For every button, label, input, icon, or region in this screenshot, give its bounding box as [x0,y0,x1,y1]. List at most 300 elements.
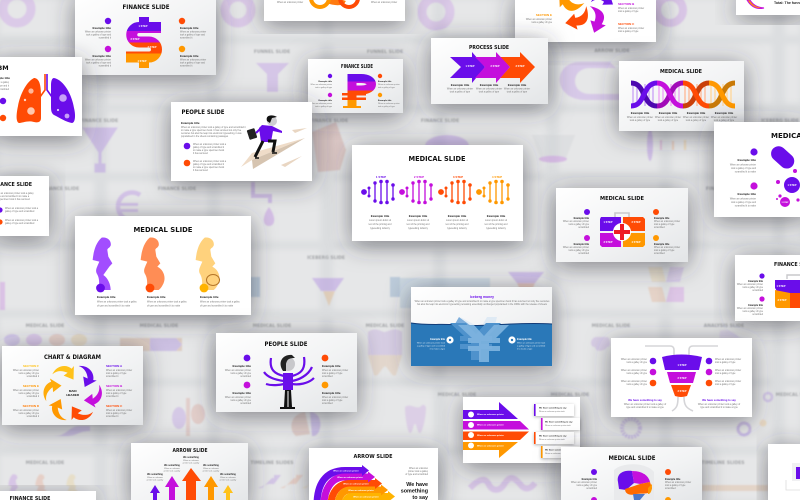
steps: When an unknown printer took a [193,143,227,146]
chart: big arrow: When an unknown printer [477,413,504,416]
steps: took a galley of type [378,105,395,108]
chart: funnel [662,354,702,397]
sections right: scrambled it [106,395,119,398]
section labels: SECTION B [618,2,635,6]
sections left: SECTION F [23,364,39,368]
chart: cycle arrows: HEADER [66,393,80,397]
steps: scrambled [240,375,252,378]
steps: scrambled [752,313,764,316]
faded background slides: FINANCE SLIDE [80,118,118,124]
callout: of type and scrambled [405,473,429,476]
arrow labels: When an unknown printer [343,482,369,486]
sections right: took a galley of type [106,412,127,415]
steps: Example title [737,158,756,162]
sections right: SECTION A [106,364,123,368]
steps right: scrambled it [180,64,193,68]
icon: briefcase: 3 STEP [778,298,787,302]
icon: man on paper plane [241,115,307,169]
example text: took a galley of type [630,119,651,122]
markers right: took a galley of type [715,372,736,375]
steps: Example title [574,243,590,246]
steps: took a galley of type [569,249,590,252]
title: PEOPLE SLIDE [182,108,224,116]
example text [97,295,241,308]
callout: We have [406,482,428,488]
slide: lungs [0,57,82,136]
icon: first aid kit: 1 STEP [604,220,613,224]
title: PEOPLE SLIDE [264,341,308,348]
steps: took a galley of type [231,372,252,375]
callout: When an unknown [409,468,429,470]
chart: double helix [631,83,735,106]
faded background slides: TIMELINE SLIDES [701,460,745,466]
example text: Lorem ipsum dolor sit [369,219,391,222]
icon: lungs [17,74,75,123]
sections left: took a galley of type [19,372,40,375]
icon: many-armed figure [264,355,314,409]
steps: When an unknown printer took a [193,160,227,163]
example text: typesetting industry [447,227,468,230]
left callout: When an unknown printer took [417,342,446,344]
steps: Example title [322,391,341,395]
slide: arrow curved [309,448,438,500]
faded background slides: FINANCE SLIDE [41,186,79,192]
steps right: took a galley of type and [180,34,206,36]
steps [563,209,680,255]
slide: medical helix [619,61,744,131]
slide: finance left [0,176,49,236]
faded background slides: ICEBERG SLIDE [307,255,345,261]
chart: DNA steps: 1 STEP [376,175,386,179]
icon: briefcase [775,275,800,308]
steps: scrambled [654,226,665,229]
example text: took a galley of type [714,119,735,122]
intro text: When an unknown printer took a galley of type and scrambled it to make a type specimen book It has survived not only five centuries [415,300,550,303]
faded background slides: TIMELINE SLIDES [250,460,294,466]
example text: took a galley of type [658,119,679,122]
sections left: scrambled it [27,395,39,398]
steps: took a galley of type [569,223,590,226]
steps: took a galley of type [577,484,598,487]
icon: first aid kit: 3 STEP [604,240,613,244]
chart: curved arrows [317,465,395,500]
section labels: took a galley of type [618,30,639,33]
icon: orange silhouette [141,238,165,290]
example text: When an unknown printer [447,88,473,90]
example text [627,111,737,122]
labels: We something [147,473,163,476]
steps: When an unknown printer [737,283,763,286]
example text: When an unknown printer [655,116,681,119]
chart: funnel: 1 STEP [678,363,687,367]
callouts: We have something to say [628,398,662,402]
title: PROCESS SLIDE [469,45,509,51]
section labels: When an unknown printer [618,7,644,10]
steps: took a galley of type [654,249,675,252]
markers left [621,358,656,386]
sections left: When an unknown printer [13,389,39,392]
title: MEDICAL SLIDE [660,69,702,75]
sections left: scrambled it [27,415,39,418]
steps: scrambled [578,252,590,255]
labels: We something [164,464,180,467]
text block: When an unknown printer took a galley of type and scrambled it [181,126,246,129]
markers left: When an unknown printer [621,369,647,372]
text block: to make a type specimen book. It has survived not only five [181,129,242,132]
slide: arrow vertical [131,443,248,500]
arrow chevrons: 3 STEP [516,64,525,68]
callouts [624,398,740,409]
steps left: scrambled it [99,64,111,68]
faded background slides: MEDICAL SLIDE [366,323,404,329]
cards: When an unknown printer took [545,424,571,427]
example text: typesetting industry [486,227,507,230]
section labels: took a galley of type [532,21,553,24]
section labels: When an unknown printer [526,18,552,21]
callout [401,468,429,500]
faded background slides: FINANCE SLIDE [158,186,196,192]
title: FINANCE SLIDE [341,64,373,70]
example text: When an unknown printer [683,116,709,119]
sections left: When an unknown printer [13,409,39,412]
arrow chevrons: 2 STEP [491,64,500,68]
faded background slides: ANALYSIS SLIDE [704,323,744,329]
right callout: a galley of type and scrambled [517,344,546,348]
text block: When an unknown printer took a [5,207,39,210]
markers left: took a galley of type [627,383,648,386]
example text: Example title [451,83,470,87]
intro text: but also the leap into electronic typesetting remaining essentially unchanged popularised in the 1960s with the release of sheets [417,303,548,306]
slide: medical brain [561,447,702,500]
title: CHART & DIAGRAM [44,354,101,361]
steps: scrambled [322,375,333,378]
icon: first aid kit: 4 STEP [632,240,641,244]
markers left: When an unknown printer [621,380,647,383]
icon: iceberg yen [450,323,509,362]
slide: top glasses: When an unknown printer [277,1,303,4]
steps: scrambled [240,402,252,405]
example text: Example title [487,214,506,218]
faded background slides: FINANCE SLIDE [421,118,459,124]
example text: Example title [687,111,706,115]
steps: took a galley of type and [731,167,757,170]
slide: process [431,38,548,104]
slide: bottom right [768,444,800,500]
faded background slides: MEDICAL SLIDE [26,460,64,466]
example text: Example title [200,295,219,299]
slide: chart and diagram [2,346,143,427]
sections right: When an unknown printer [106,409,132,412]
arrow chevrons [450,52,535,83]
icon: dollar chart: 4 STEP [138,59,147,63]
markers right: When an unknown printer [715,358,741,361]
labels: printer took a galley [183,462,199,464]
text block: centuries but also the leap into electronic typesetting, it was [181,132,242,135]
steps: galley of type and scrambled it [193,146,224,149]
steps: Example title [665,478,681,481]
cards [534,404,580,458]
example text: Example title [97,295,116,299]
example text: When an unknown printer [504,88,530,90]
steps: scrambled [578,226,590,229]
steps right: Example title [180,54,199,58]
steps: When an unknown printer [378,83,400,86]
labels: printer took a galley [203,470,219,472]
steps: took a galley of type [322,399,343,402]
section labels: When an unknown printer [618,27,644,30]
steps [730,148,758,208]
example text: Example title [409,214,428,218]
steps: Example title [748,304,764,307]
slide: finance ruble [308,59,403,113]
sections right: SECTION C [106,404,123,408]
faded background slides: ARROW SLIDE [594,48,630,54]
example text [447,83,530,94]
example text: text of the printing and [369,223,392,226]
markers right: When an unknown printer [715,369,741,372]
steps: When an unknown printer [654,220,680,223]
markers left: took a galley of type [627,372,648,375]
steps: When an unknown printer [571,481,597,484]
faded background slides: ICEBERG SLIDE [761,118,799,124]
pipes [645,346,718,411]
example text: When an unknown printer [711,116,737,119]
steps: galley of type and scrambled it [193,163,224,166]
faded background slides: MEDICAL SLIDE [592,323,630,329]
steps: Example title [748,280,764,283]
right callout: When an unknown printer took [517,342,546,344]
title: MEDICAL SLIDE [600,196,644,202]
steps: When an unknown printer [225,396,251,399]
steps right: When an unknown printer [180,58,206,62]
icon: dollar chart: 1 STEP [139,24,148,28]
steps: When an unknown printer [737,307,763,310]
callouts: type and scrambled it to make a type [626,406,664,409]
section labels: took a galley of type [618,10,639,13]
steps [310,74,400,108]
steps: scrambled [586,487,598,490]
labels: When an unknown [164,468,180,470]
icon: dollar chart [126,17,161,68]
steps: When an unknown printer [310,102,332,105]
icon: pill and dots [768,143,800,207]
faded background slides: MEDICAL SLIDE [551,392,589,398]
example text: Example title [371,214,390,218]
labels: printer took a galley [220,478,236,482]
steps right: took a galley of type and [180,62,206,64]
sections right: took a galley of type [106,372,127,375]
steps: scrambled it to make [735,204,757,208]
labels: We something [203,464,219,467]
cards: We have something to say [539,406,567,410]
steps: took a galley of type [743,286,764,289]
callouts: type and scrambled it to make a type [700,406,738,409]
icon: ruble [342,78,372,108]
callout: something [401,488,428,494]
steps: took a galley of type [315,86,332,89]
text block: galley of type and scrambled [5,222,35,225]
steps: took a galley of type [378,86,395,89]
labels: When an unknown [147,477,163,479]
title: MEDICAL SLIDE [134,226,193,234]
markers right: When an unknown printer [715,380,741,383]
section labels: SECTION E [536,13,552,17]
steps [571,469,691,500]
callouts: When an unknown printer took a galley of [624,403,666,406]
slide: finance dollar [75,0,216,75]
steps: When an unknown printer [322,396,348,399]
steps left: When an unknown printer [85,58,111,62]
steps: Example title [318,80,333,83]
right callout: it to make a type [517,348,533,350]
icon: dollar chart: 2 STEP [131,37,140,41]
icon: pill and dots: 1 STEP [788,183,797,187]
slide: medical pill [714,122,800,217]
steps: When an unknown printer [322,369,348,372]
sections right [106,364,132,418]
title: ARROW SLIDE [354,454,393,460]
icon: yellow silhouette [196,238,220,290]
text block: galley of type and scrambled [5,210,35,213]
steps left: took a galley of type and [86,62,112,64]
steps: scrambled [665,487,676,490]
slide: funnel [611,338,752,417]
example text [369,214,508,230]
steps: took a galley of type and [731,201,757,204]
slide: finance briefcase [735,255,800,321]
steps: When an unknown printer [225,369,251,372]
icon: purple silhouette [93,238,112,290]
title: MEDICAL SLIDE [408,155,466,163]
arrow labels: When an unknown printer [353,496,379,498]
steps left: Example title [92,54,111,58]
chart: cycle arrows [37,359,108,427]
sections right: scrambled it [106,415,119,418]
example text: When an unknown printer took a galley [147,300,188,304]
example text: took a galley of type [686,119,707,122]
cards: When an unknown printer took [539,438,565,441]
steps left: took a galley of type and [86,34,112,36]
slide: section swirl [515,0,656,42]
sections left [13,364,40,418]
steps: Example title [654,217,670,220]
steps: When an unknown printer [563,246,589,249]
steps right: When an unknown printer [180,30,206,34]
sections right: took a galley of type [106,392,127,395]
example text: Example title [715,111,734,115]
title: MEDICAL SLIDE [608,455,656,462]
example text: When an unknown printer [627,116,653,119]
example text: When an unknown printer took a galley [200,300,241,304]
faded background slides: FINANCE SLIDE [706,186,744,192]
icon: berg top [455,317,497,325]
example text: of type and scrambled it to make [200,304,234,308]
example text: Example title [631,111,650,115]
example text: took a galley of type [479,90,500,94]
arrow labels: When an unknown printer [333,470,359,472]
sections left: took a galley of type [19,412,40,415]
steps: When an unknown printer [665,481,691,484]
arrow chevrons: 1 STEP [466,64,475,68]
section labels [526,2,644,33]
example text: When an unknown printer took a galley [97,300,138,304]
slide: top right [736,0,800,15]
markers left: When an unknown printer [621,358,647,361]
steps: took a galley of type [322,372,343,375]
steps right: Example title [180,26,199,30]
example text: Lorem ipsum dolor sit [485,219,507,222]
cards: When an unknown printer took [539,410,565,413]
sections left: scrambled it [27,375,39,378]
faded background slides: MEDICAL SLIDE [140,323,178,329]
icon: first aid kit: 2 STEP [632,220,641,224]
markers right: took a galley of type [715,361,736,364]
slide: top glasses [264,0,405,21]
labels: We something [220,473,236,476]
sections left: SECTION E [23,384,39,388]
steps: took a galley of type [315,105,332,108]
left callout: Example title [430,338,446,341]
markers right: took a galley of type [715,383,736,386]
labels: printer took a galley [147,478,163,482]
steps: to make a type specimen book [193,166,225,169]
steps: scrambled [654,252,665,255]
sections left: When an unknown printer [13,369,39,372]
chart: big arrow: When an unknown printer [477,444,504,448]
chart: DNA steps: 4 STEP [492,175,502,179]
chart: funnel: 3 STEP [678,389,687,393]
steps: It has survived [193,169,209,172]
faded background slides: FINANCE SLIDE [310,118,348,124]
markers left: took a galley of type [627,361,648,364]
slide: medical women [75,216,251,315]
steps: It has survived [193,152,209,155]
steps [737,273,765,316]
example text: Example title [659,111,678,115]
text block [0,192,39,225]
icon: swirl arrows [553,0,617,35]
steps: scrambled [322,402,333,405]
left callout [417,336,454,350]
faded background slides: FUNNEL SLIDE [254,49,290,55]
text block: popularised in the sheets containing passages [181,135,229,138]
chart: big arrow [463,402,529,458]
left callout: a galley of type and scrambled [417,344,446,348]
steps: took a galley of type [231,399,252,402]
steps: Example title [582,478,598,481]
steps: When an unknown printer [310,83,332,86]
steps: Example title [737,192,756,196]
steps [225,355,348,405]
icon: chart fragment [786,463,800,490]
icon: pill and dots: 3 STEP [782,202,789,204]
right callout [508,336,546,350]
faded background slides: MEDICAL SLIDE [438,392,476,398]
steps left [85,18,112,68]
steps: When an unknown printer [563,220,589,223]
example text: of type and scrambled it to make [147,304,181,308]
sections right: When an unknown printer [106,389,132,392]
steps [0,76,10,121]
arrow labels [333,470,379,498]
slide: bottom left [0,491,96,500]
intro text [415,300,550,306]
left callout: it to make a type [430,348,446,350]
slide: medical kit [556,188,688,262]
title: ARROW SLIDE [172,448,208,454]
chart: big arrow: When an unknown printer [477,424,504,426]
icon: fetus [206,274,220,286]
